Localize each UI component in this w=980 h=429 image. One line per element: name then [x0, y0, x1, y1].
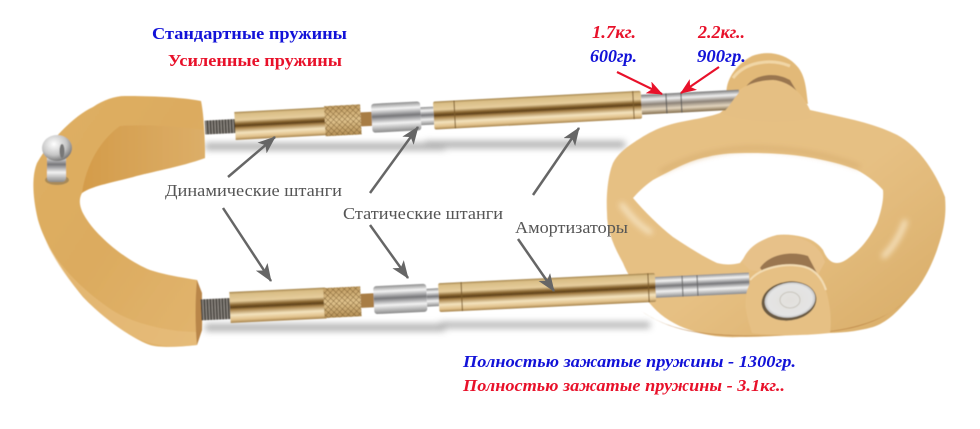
label: dynamic rods: Динамические штанги — [165, 181, 342, 200]
grey arrows from labels to parts — [223, 127, 579, 291]
shadows under the rods — [205, 141, 650, 331]
icon: round button — [759, 278, 819, 324]
knurled collar bottom — [323, 286, 362, 318]
right ring back lug — [727, 53, 808, 104]
dynamic rod tube bottom — [229, 287, 327, 323]
red arrow to first spring mark — [617, 72, 662, 94]
label: static rods: Статические штанги — [343, 204, 503, 223]
label: 1.7 kg: 1.7кг. — [592, 22, 636, 42]
heading: reinforced springs: Усиленные пружины — [168, 51, 342, 70]
static rod sleeve top — [371, 101, 421, 133]
note: fully compressed reinforced springs: Полностью зажатые пружины - 3.1кг.. — [462, 376, 785, 395]
red arrow to second spring mark — [681, 67, 719, 93]
chrome piston bottom — [655, 273, 750, 298]
bottom lug cavity — [760, 253, 818, 280]
note: fully compressed standard springs: Полностью зажатые пружины - 1300гр. — [462, 352, 796, 371]
bottom lug back — [742, 236, 825, 280]
icon: metal pin on left support — [42, 135, 72, 185]
label: 900 g: 900гр. — [697, 46, 746, 66]
product photo drawing — [33, 53, 945, 347]
shock absorber tube bottom — [438, 273, 656, 312]
right ring-shaped support — [607, 80, 945, 337]
screw thread bottom — [201, 298, 232, 320]
label: 2.2 kg: 2.2кг.. — [697, 22, 745, 42]
shock absorber tube top — [433, 91, 642, 130]
chrome piston top — [641, 90, 740, 115]
top rod assembly — [204, 85, 740, 143]
knurled collar top — [324, 104, 362, 136]
bottom lug front with button — [745, 265, 831, 335]
label: 600 g: 600гр. — [590, 46, 637, 66]
static rod sleeve bottom — [373, 284, 427, 314]
top lug front cover — [722, 82, 812, 122]
left U-shaped support — [33, 96, 205, 347]
dynamic rod tube top — [234, 107, 329, 140]
heading: standard springs: Стандартные пружины — [152, 24, 347, 43]
screw thread top — [205, 119, 236, 135]
bottom rod assembly — [200, 268, 750, 324]
label: shock absorbers: Амортизаторы — [515, 218, 629, 237]
